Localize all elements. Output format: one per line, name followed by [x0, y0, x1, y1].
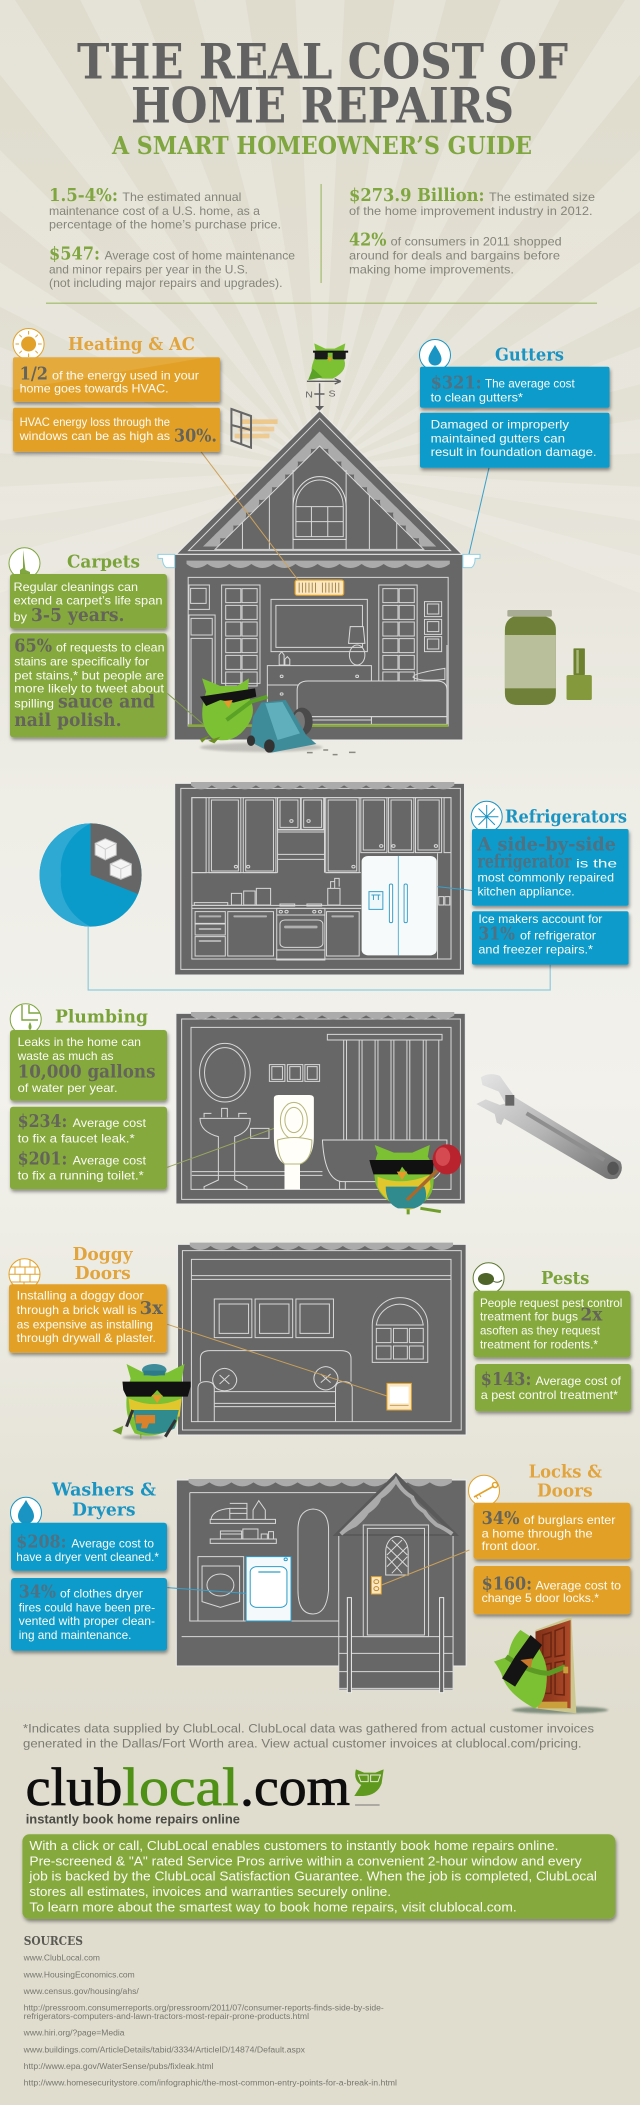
- card: half of energy: [13, 357, 220, 402]
- stat: 1.5-4%: [49, 185, 281, 232]
- heading: Locks &: [529, 1461, 602, 1482]
- card: leaks: waste as much as: [17, 1049, 114, 1063]
- card: dryer vent cost: have a dryer vent cleaned.*: [16, 1550, 159, 1564]
- card: stain requests: nail polish.: [14, 711, 122, 731]
- heading: Doors: [75, 1263, 131, 1284]
- laundry room panel: [176, 1479, 466, 1666]
- heading: Gutters: [495, 345, 564, 366]
- panel: pests: [473, 1263, 631, 1411]
- gutters drawn on house: [158, 554, 480, 568]
- sources list: www.census.gov/housing/ahs/: [23, 1987, 140, 1996]
- card: leaks: [10, 1030, 167, 1101]
- icon: rat: [473, 1263, 504, 1294]
- heading: Washers &: [51, 1480, 156, 1501]
- sources list: www.HousingEconomics.com: [23, 1970, 135, 1979]
- stat: 42%: [349, 230, 562, 276]
- card: burglars: of burglars enter: [524, 1513, 616, 1527]
- stat: $547: $547:: [49, 243, 100, 264]
- bathroom panel: [176, 1012, 465, 1204]
- card: foundation damage: maintained gutters can: [431, 431, 565, 445]
- panel: about ClubLocal: [22, 1834, 615, 1919]
- card: pest treatment cost: Average cost of: [536, 1374, 622, 1388]
- heading: [529, 1461, 602, 1502]
- house: bedroom and roof: [174, 411, 463, 740]
- card: ice makers: Ice makers account for: [478, 912, 602, 926]
- title: [77, 32, 568, 135]
- sources list: http://www.epa.gov/WaterSense/pubs/fixleak.html: [24, 2062, 214, 2071]
- owl weathervane: [305, 343, 348, 411]
- card: dryer fires: [11, 1578, 167, 1651]
- card: burglars: 34%: [482, 1509, 520, 1529]
- card: stain requests: [10, 633, 167, 737]
- logo: clublocal.com: .com: [240, 1757, 350, 1817]
- card: side-by-side: kitchen appliance.: [478, 884, 575, 898]
- stat: 42%: making home improvements.: [349, 262, 514, 276]
- heating vent: [295, 580, 344, 595]
- card: window energy loss: 30%.: [174, 427, 217, 447]
- heading: Doors: [537, 1481, 593, 1502]
- card: ice makers: of refrigerator: [520, 928, 596, 942]
- card: stain requests: stains are specifically for: [14, 655, 149, 669]
- panel: locks and doors: [468, 1461, 630, 1614]
- sources list: www.buildings.com/ArticleDetails/tabid/3334/ArticleID/14874/Default.aspx: [23, 2045, 305, 2054]
- subtitle: A SMART HOMEOWNER’S GUIDE: [111, 131, 532, 160]
- panel: plumbing: [10, 1004, 167, 1189]
- card: pest treatment cost: a pest control treatment*: [481, 1388, 618, 1402]
- card: faucet and toilet cost: $234:: [18, 1112, 67, 1132]
- panel: about ClubLocal: With a click or call, ClubLocal enables customers to instantly book home repairs online.: [29, 1839, 558, 1853]
- sources list: http://pressroom.consumerreports.org/pressroom/2011/07/consumer-reports-finds-side-by-side-: [24, 2004, 384, 2013]
- logo: clublocal.com: local: [122, 1757, 239, 1817]
- card: stain requests: spilling: [14, 697, 54, 711]
- stat: $273.9 billion: of the home improvement industry in 2012.: [349, 204, 593, 218]
- sources list: www.ClubLocal.com: [23, 1954, 100, 1963]
- stat: $273.9 billion: $273.9 Billion:: [349, 185, 484, 206]
- card: dryer fires: ing and maintenance.: [19, 1628, 131, 1642]
- card: faucet and toilet cost: to fix a running toilet.*: [18, 1168, 144, 1182]
- card: dryer vent cost: [11, 1523, 167, 1571]
- owl handyman with tools: [113, 1364, 191, 1440]
- panel: refrigerators: [471, 801, 629, 965]
- heading: Pests: [541, 1268, 589, 1289]
- icon: leaky pipe: [10, 1004, 41, 1035]
- stat: $273.9 billion: [349, 185, 595, 218]
- card: foundation damage: result in foundation damage.: [431, 445, 597, 459]
- card: doggy door cost: as expensive as installing: [17, 1317, 153, 1331]
- card: side-by-side: refrigerator: [478, 851, 572, 872]
- card: gutter cleaning cost: $321:: [431, 373, 482, 393]
- panel: about ClubLocal: Pre-screened & "A" rated Service Pros arrive within a convenient 2-hour window and every: [29, 1854, 582, 1868]
- card: dryer fires: fires could have been pre-: [19, 1600, 155, 1614]
- card: bugs vs rodents: treatment for rodents.*: [480, 1337, 598, 1351]
- card: leaks: Leaks in the home can: [18, 1035, 141, 1049]
- footnote: [23, 1722, 594, 1750]
- card: doggy door cost: through drywall & plaster.: [17, 1331, 156, 1345]
- card: faucet and toilet cost: Average cost: [73, 1153, 147, 1167]
- icon: vacuum: [9, 548, 40, 579]
- card: lock cost: Average cost to: [536, 1578, 621, 1592]
- panel: doggy doors: [9, 1244, 167, 1353]
- stat: 42%: 42%: [349, 230, 386, 251]
- card: side-by-side: most commonly repaired: [478, 871, 614, 885]
- card: half of energy: home goes towards HVAC.: [20, 382, 169, 396]
- heading: Refrigerators: [505, 807, 627, 828]
- icon: flame: [10, 1497, 42, 1528]
- stat: 1.5-4%: percentage of the home’s purchase price.: [49, 218, 281, 232]
- card: lock cost: [474, 1566, 630, 1614]
- card: dryer vent cost: $208:: [16, 1532, 66, 1552]
- stat: 42%: around for deals and bargains before: [349, 248, 560, 262]
- owl at front door: [494, 1617, 608, 1714]
- heading: Dryers: [72, 1500, 136, 1521]
- card: doggy door cost: Installing a doggy door: [17, 1288, 144, 1302]
- card: burglars: a home through the: [482, 1526, 593, 1540]
- doggy door: [167, 1324, 411, 1410]
- card: carpet life span: Regular cleanings can: [14, 580, 138, 594]
- sources heading: SOURCES: [24, 1934, 83, 1948]
- card: side-by-side: [472, 829, 629, 906]
- panel: washers and dryers: [10, 1480, 167, 1651]
- card: pest treatment cost: $143:: [481, 1370, 531, 1390]
- toilet: [167, 1095, 314, 1189]
- heading: Carpets: [67, 552, 140, 573]
- icon: window with heat loss: [231, 409, 278, 448]
- stat: $547: (not including major repairs and upgrades).: [49, 276, 282, 290]
- card: gutter cleaning cost: to clean gutters*: [431, 390, 523, 404]
- card: half of energy: 1/2: [20, 364, 48, 384]
- icon: key: [468, 1475, 500, 1506]
- living room panel: [178, 1243, 466, 1435]
- heading: [51, 1480, 156, 1521]
- heading: Doggy: [73, 1244, 133, 1265]
- sources list: www.hiri.org/?page=Media: [23, 2029, 125, 2038]
- card: stain requests: sauce and: [58, 693, 155, 713]
- card: dryer vent cost: Average cost to: [71, 1536, 154, 1550]
- sources list: http://www.homesecuritystore.com/infographic/the-most-common-entry-points-for-a-break-in.html: [24, 2079, 397, 2088]
- card: bugs vs rodents: asoften as they request: [480, 1324, 601, 1338]
- card: ice makers: and freezer repairs.*: [478, 942, 593, 956]
- sources list: [23, 1954, 397, 2088]
- card: doggy door cost: [9, 1284, 167, 1353]
- owl weathervane: S: [329, 390, 336, 399]
- logo: clublocal.com: [26, 1757, 384, 1817]
- card: window energy loss: HVAC energy loss through the: [20, 415, 170, 429]
- card: ice makers: 31%: [478, 924, 515, 944]
- card: burglars: front door.: [482, 1539, 540, 1553]
- icon: logo owl: [354, 1769, 384, 1805]
- card: side-by-side: is the: [576, 856, 618, 870]
- stat: $547: Average cost of home maintenance: [104, 248, 295, 262]
- card: dryer fires: vented with proper clean-: [19, 1614, 155, 1628]
- card: side-by-side: A side-by-side: [477, 835, 616, 856]
- card: leaks: of water per year.: [18, 1081, 118, 1095]
- card: doggy door cost: 3x: [140, 1299, 164, 1319]
- tagline: instantly book home repairs online: [26, 1811, 240, 1826]
- card: stain requests: more likely to tweet about: [14, 681, 165, 695]
- card: foundation damage: Damaged or improperly: [431, 417, 569, 431]
- card: stain requests: of requests to clean: [56, 641, 164, 655]
- ice maker pie chart: [40, 823, 550, 990]
- card: dryer fires: 34%: [19, 1583, 56, 1603]
- heading: [73, 1244, 133, 1284]
- stat: $547: and minor repairs per year in the U.S.: [49, 262, 248, 276]
- card: pest treatment cost: [475, 1364, 631, 1411]
- leader: gutters: [469, 468, 489, 554]
- card: carpet life span: extend a carpet’s life span: [14, 594, 162, 608]
- card: window energy loss: windows can be as high as: [19, 429, 170, 443]
- stat: 1.5-4%: maintenance cost of a U.S. home, as a: [49, 204, 260, 218]
- card: doggy door cost: through a brick wall is: [17, 1303, 137, 1317]
- card: faucet and toilet cost: to fix a faucet leak.*: [18, 1131, 135, 1145]
- card: bugs vs rodents: 2x: [580, 1306, 603, 1326]
- card: foundation damage: [420, 413, 610, 468]
- card: carpet life span: by: [14, 610, 27, 624]
- card: bugs vs rodents: [474, 1291, 630, 1357]
- card: burglars: [474, 1503, 630, 1559]
- card: half of energy: of the energy used in your: [52, 368, 199, 382]
- card: leaks: 10,000 gallons: [18, 1062, 156, 1082]
- refrigerator: [362, 856, 473, 955]
- card: carpet life span: 3-5 years.: [31, 606, 124, 626]
- stat: 42%: of consumers in 2011 shopped: [391, 235, 562, 249]
- footnote: generated in the Dallas/Fort Worth area. View actual customer invoices at clublocal.com/pricing.: [23, 1736, 582, 1750]
- icon: sun: [13, 328, 44, 360]
- panel: about ClubLocal: stores all estimates, invoices and warranties securely online.: [29, 1885, 391, 1899]
- icon: bricks: [9, 1259, 40, 1290]
- card: faucet and toilet cost: $201:: [18, 1149, 67, 1169]
- wrench: [476, 1074, 622, 1179]
- stat: $547: [49, 243, 295, 290]
- porch and front door: [333, 1473, 469, 1693]
- kitchen panel: [175, 782, 464, 975]
- card: carpet life span: [10, 574, 167, 629]
- icon: snowflake: [471, 801, 502, 832]
- stat: $273.9 billion: The estimated size: [489, 190, 595, 204]
- card: lock cost: $160:: [482, 1574, 532, 1594]
- card: lock cost: change 5 door locks.*: [482, 1591, 599, 1605]
- owl plumber with plunger: [369, 1144, 461, 1214]
- leader: heating: [201, 452, 298, 580]
- stat: 1.5-4%: The estimated annual: [122, 190, 241, 204]
- card: stain requests: 65%: [14, 637, 52, 657]
- panel: carpets: [9, 548, 167, 737]
- owl weathervane: N: [305, 390, 313, 400]
- logo: clublocal.com: club: [26, 1757, 122, 1817]
- title: THE REAL COST OF: [77, 32, 568, 90]
- card: faucet and toilet cost: [10, 1107, 167, 1189]
- panel: heating and AC: [13, 328, 220, 452]
- jar of sauce and nail polish: [505, 610, 592, 705]
- card: ice makers: [472, 911, 629, 965]
- panel: about ClubLocal: job is backed by the ClubLocal Satisfaction Guarantee. When the job is completed, ClubLocal: [28, 1870, 597, 1884]
- panel: gutters: [420, 340, 610, 468]
- card: faucet and toilet cost: Average cost: [73, 1116, 147, 1130]
- sources list: refrigerators-computers-and-lawn-tractors-most-repair-prone-products.html: [24, 2012, 309, 2021]
- title: HOME REPAIRS: [131, 77, 514, 135]
- icon: water drop: [420, 340, 450, 370]
- stat: 1.5-4%: 1.5-4%:: [49, 185, 118, 206]
- panel: about ClubLocal: To learn more about the smartest way to book home repairs, visit clublocal.com.: [29, 1900, 517, 1914]
- card: gutter cleaning cost: [420, 367, 610, 408]
- owl with carpet cleaner: [167, 678, 356, 755]
- card: bugs vs rodents: treatment for bugs: [480, 1310, 578, 1324]
- card: stain requests: pet stains,* but people are: [14, 669, 164, 683]
- heading: Heating & AC: [68, 334, 195, 355]
- card: dryer fires: of clothes dryer: [60, 1587, 143, 1601]
- card: window energy loss: [13, 408, 220, 452]
- card: gutter cleaning cost: The average cost: [485, 377, 575, 391]
- card: bugs vs rodents: People request pest control: [480, 1296, 622, 1310]
- dryer: [167, 1557, 291, 1621]
- footnote: *Indicates data supplied by ClubLocal. ClubLocal data was gathered from actual customer invoices: [23, 1722, 594, 1736]
- heading: Plumbing: [55, 1006, 148, 1027]
